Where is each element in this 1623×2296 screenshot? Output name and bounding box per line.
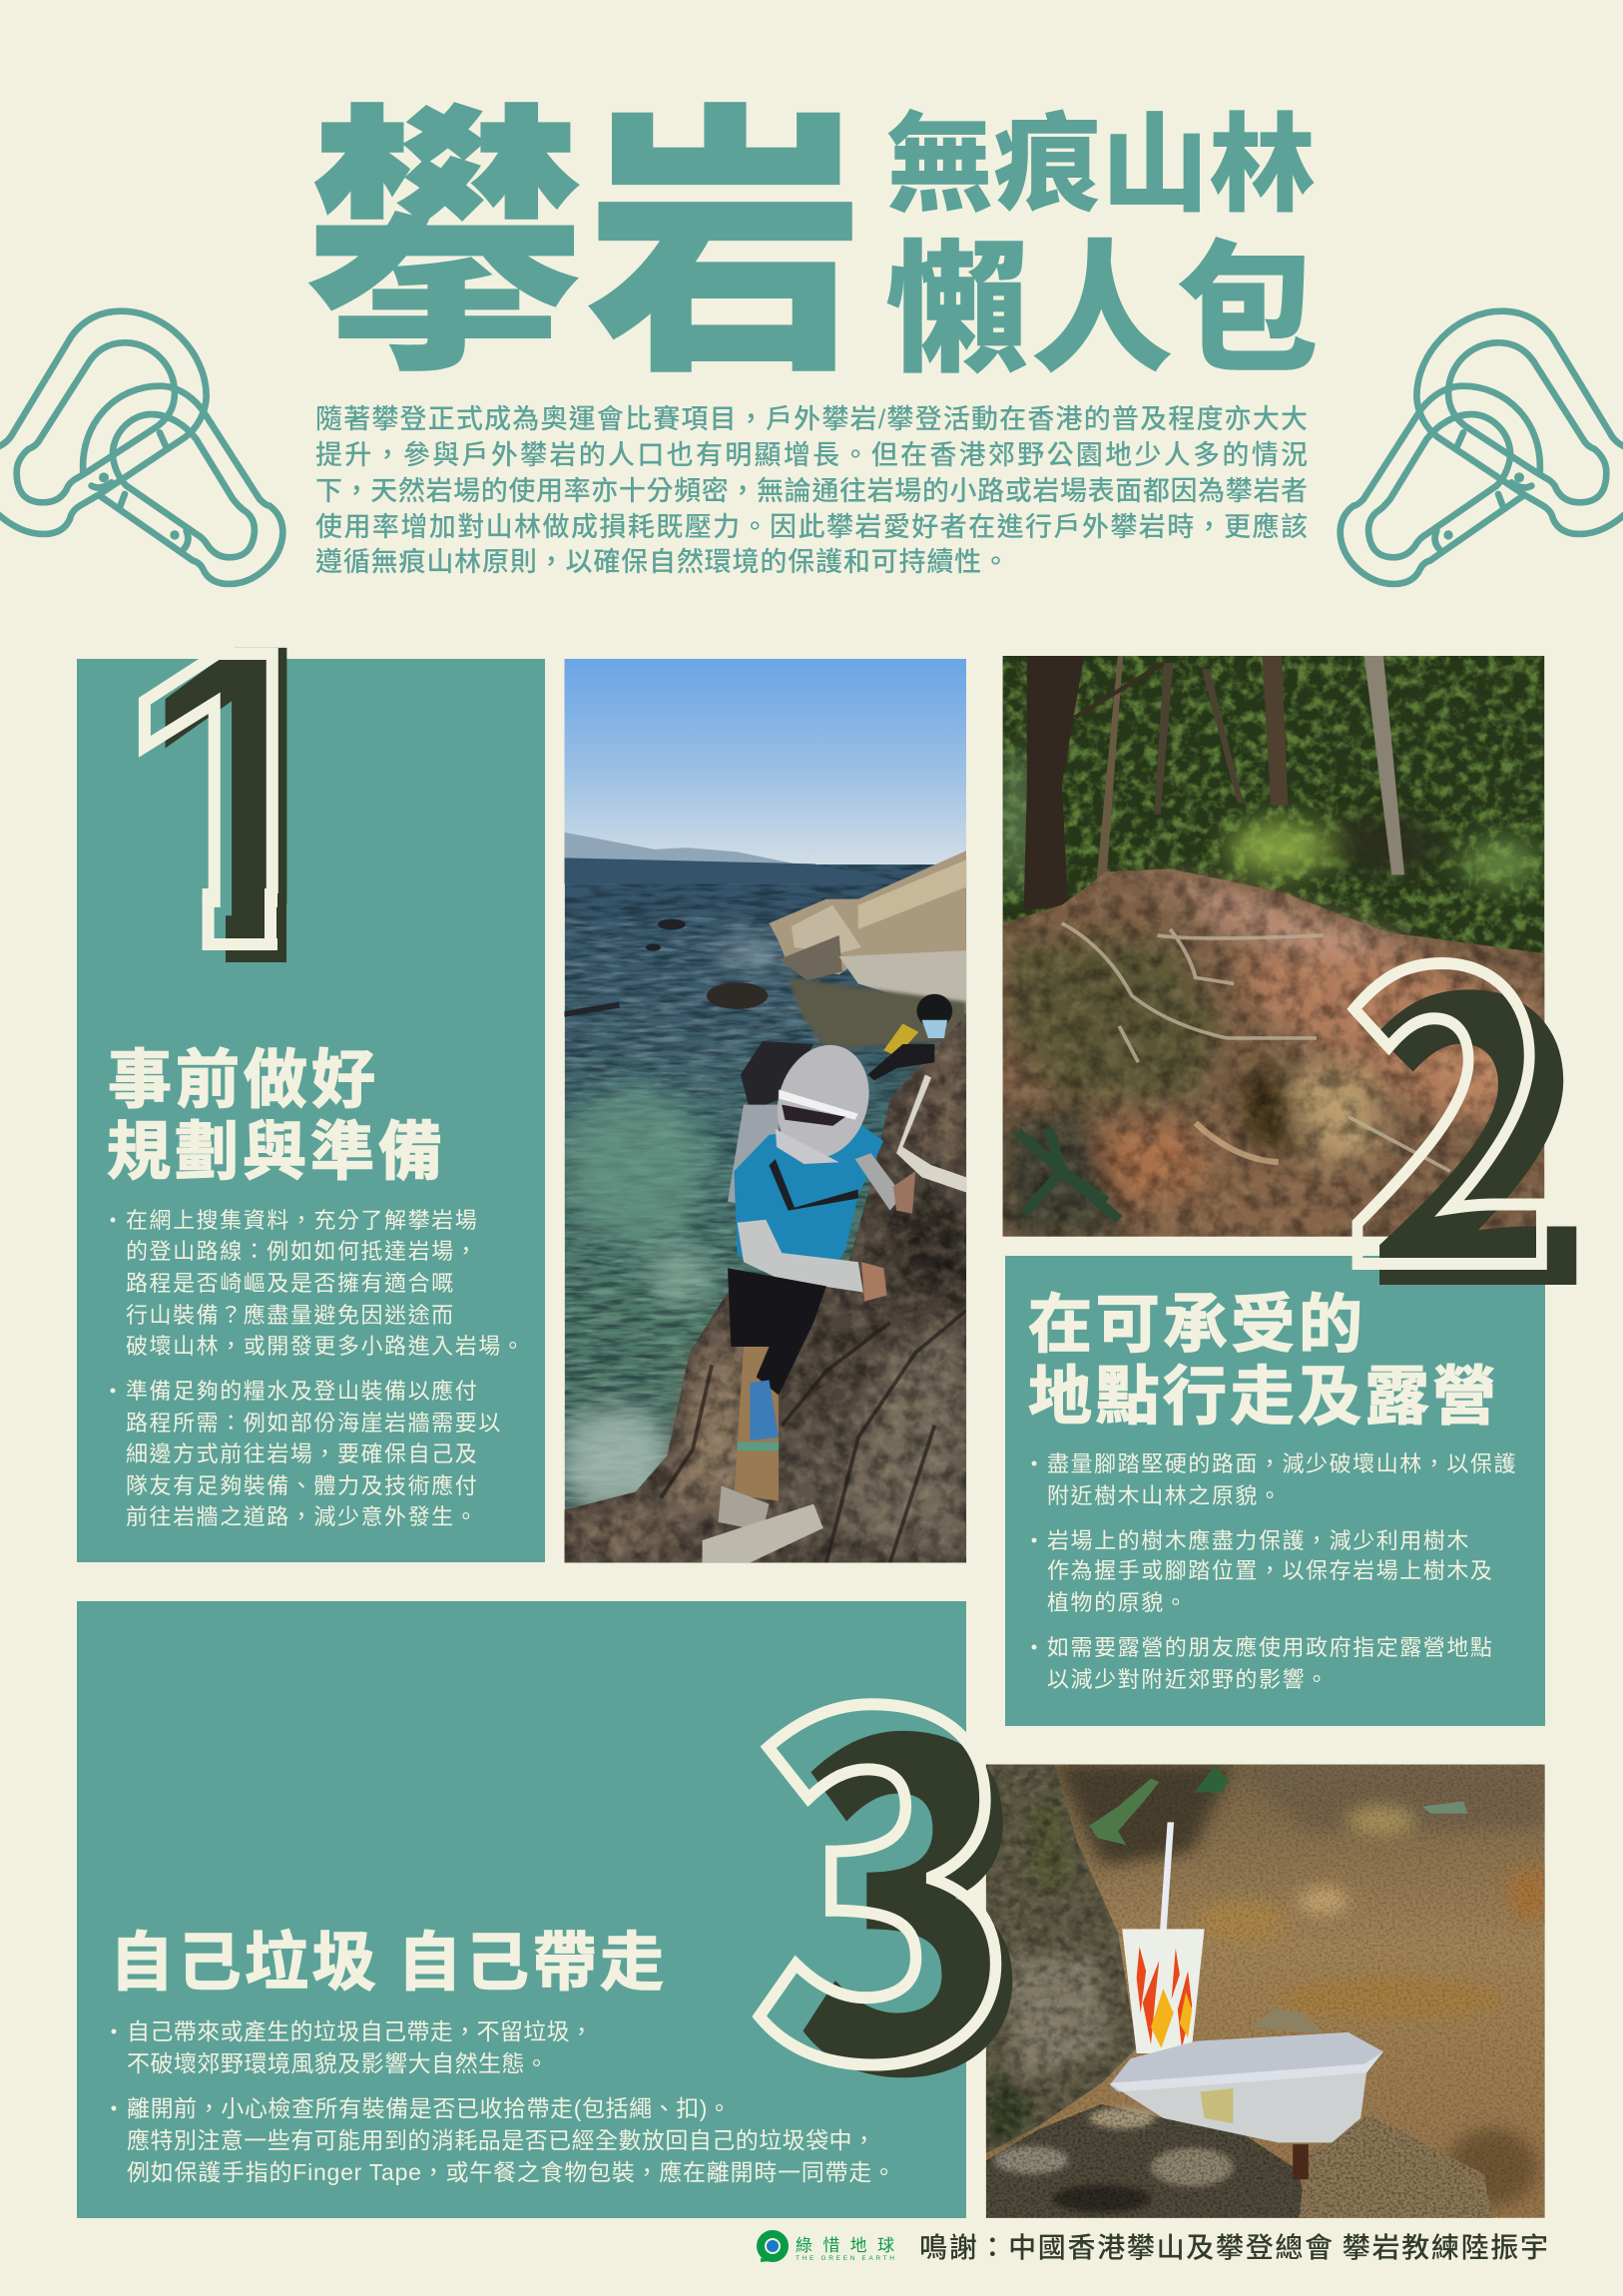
intro paragraph: 使用率增加對山林做成損耗既壓力。因此攀岩愛好者在進行戶外攀岩時，更應該 [315, 512, 1308, 542]
heading: step 2: 地點行走及露營 [1028, 1361, 1496, 1433]
text: step 1 bullets: 在網上搜集資料，充分了解攀岩場 [126, 1208, 478, 1233]
title: 懶人包 [885, 232, 1319, 390]
number 3: 3 [749, 1516, 1020, 2193]
text: step 2 bullets: 植物的原貌。 [1047, 1590, 1188, 1615]
icon: right carabiners [1341, 311, 1623, 584]
text: step 1 bullets: 細邊方式前往岩場，要確保自己及 [126, 1441, 478, 1466]
text: step 2 bullets: 盡量腳踏堅硬的路面，減少破壞山林，以保護 [1047, 1451, 1517, 1476]
heading: step 2: 在可承受的 [1028, 1289, 1362, 1361]
title [304, 89, 1319, 405]
text: step 3 bullets: 不破壞郊野環境風貌及影響大自然生態。 [127, 2050, 548, 2076]
text: step 1 bullets: 前往岩牆之道路，減少意外發生。 [126, 1504, 478, 1529]
icon: green earth [761, 2234, 785, 2262]
footer logo [761, 2231, 894, 2262]
photo: eroded forest trail [998, 656, 1544, 1237]
text: step 3 bullets: 離開前，小心檢查所有裝備是否已收拾帶走(包括繩、扣)。 [127, 2095, 731, 2121]
text: logo english: THE GREEN EARTH [796, 2255, 894, 2262]
text: step 1 bullets: 路程是否崎嶇及是否擁有適合嘅 [126, 1271, 455, 1296]
text: step 2 bullets: 岩場上的樹木應盡力保護，減少利用樹木 [1047, 1528, 1470, 1553]
text: step 2 bullets: 如需要露營的朋友應使用政府指定露營地點 [1047, 1635, 1493, 1660]
text: step 1 bullets: 行山裝備？應盡量避免因迷途而 [126, 1303, 455, 1328]
panel: step 1 [77, 659, 545, 1562]
heading: step 2 [1028, 1289, 1496, 1433]
number 1: 1 [116, 562, 350, 1034]
text: step 3 bullets: 自己帶來或產生的垃圾自己帶走，不留垃圾， [127, 2018, 593, 2044]
number 2: 2 [1343, 805, 1560, 1379]
photo: litter by tree [986, 1765, 1550, 2218]
intro paragraph: 隨著攀登正式成為奧運會比賽項目，戶外攀岩/攀登活動在香港的普及程度亦大大 [315, 404, 1308, 434]
intro paragraph: 遵循無痕山林原則，以確保自然環境的保護和可持續性。 [315, 547, 1009, 577]
intro paragraph: 下，天然岩場的使用率亦十分頻密，無論通往岩場的小路或岩場表面都因為攀岩者 [315, 476, 1308, 506]
text: step 3 bullets [112, 2018, 895, 2185]
intro paragraph [315, 404, 1308, 577]
heading: step 3: 自己垃圾 自己帶走 [110, 1912, 664, 2004]
text: step 2 bullets: 附近樹木山林之原貌。 [1047, 1483, 1283, 1508]
title: 無痕山林 [886, 105, 1316, 225]
text: step 2 bullets: 作為握手或腳踏位置，以保存岩場上樹木及 [1047, 1558, 1493, 1583]
number 2: 2 [1363, 835, 1596, 1398]
text: step 2 bullets [1032, 1451, 1517, 1692]
title: 攀岩 [304, 89, 865, 405]
panel: step 2 [1005, 1256, 1545, 1726]
panel: step 3 [77, 1601, 966, 2218]
heading: step 1: 規劃與準備 [107, 1116, 442, 1188]
text: step 1 bullets: 的登山路線：例如如何抵達岩場， [126, 1239, 478, 1264]
text: step 2 bullets: 以減少對附近郊野的影響。 [1047, 1667, 1330, 1692]
text: step 3 bullets: 例如保護手指的Finger Tape，或午餐之食物包裝，應在離開時一同帶走。 [127, 2159, 895, 2185]
heading: step 1 [107, 1044, 442, 1188]
text: step 1 bullets: 隊友有足夠裝備、體力及技術應付 [126, 1473, 478, 1498]
heading: step 1: 事前做好 [108, 1044, 375, 1116]
credit line: 鳴謝：中國香港攀山及攀登總會 攀岩教練陸振宇 [919, 2226, 1548, 2266]
text: step 3 bullets: 應特別注意一些有可能用到的消耗品是否已經全數放回自己的垃圾袋中， [127, 2127, 875, 2153]
number 3: 3 [794, 1551, 1034, 2202]
icon: left carabiners [0, 311, 282, 584]
number 1: 1 [138, 549, 361, 1060]
photo: climber on sea cliff [559, 659, 966, 1562]
text: step 1 bullets: 破壞山林，或開發更多小路進入岩場。 [126, 1334, 525, 1359]
intro paragraph: 提升，參與戶外攀岩的人口也有明顯增長。但在香港郊野公園地少人多的情況 [315, 440, 1308, 470]
text: step 1 bullets: 準備足夠的糧水及登山裝備以應付 [126, 1379, 478, 1404]
text: step 1 bullets [110, 1208, 525, 1529]
text: logo name: 綠惜地球 [796, 2231, 894, 2256]
text: step 1 bullets: 路程所需：例如部份海崖岩牆需要以 [126, 1411, 502, 1435]
